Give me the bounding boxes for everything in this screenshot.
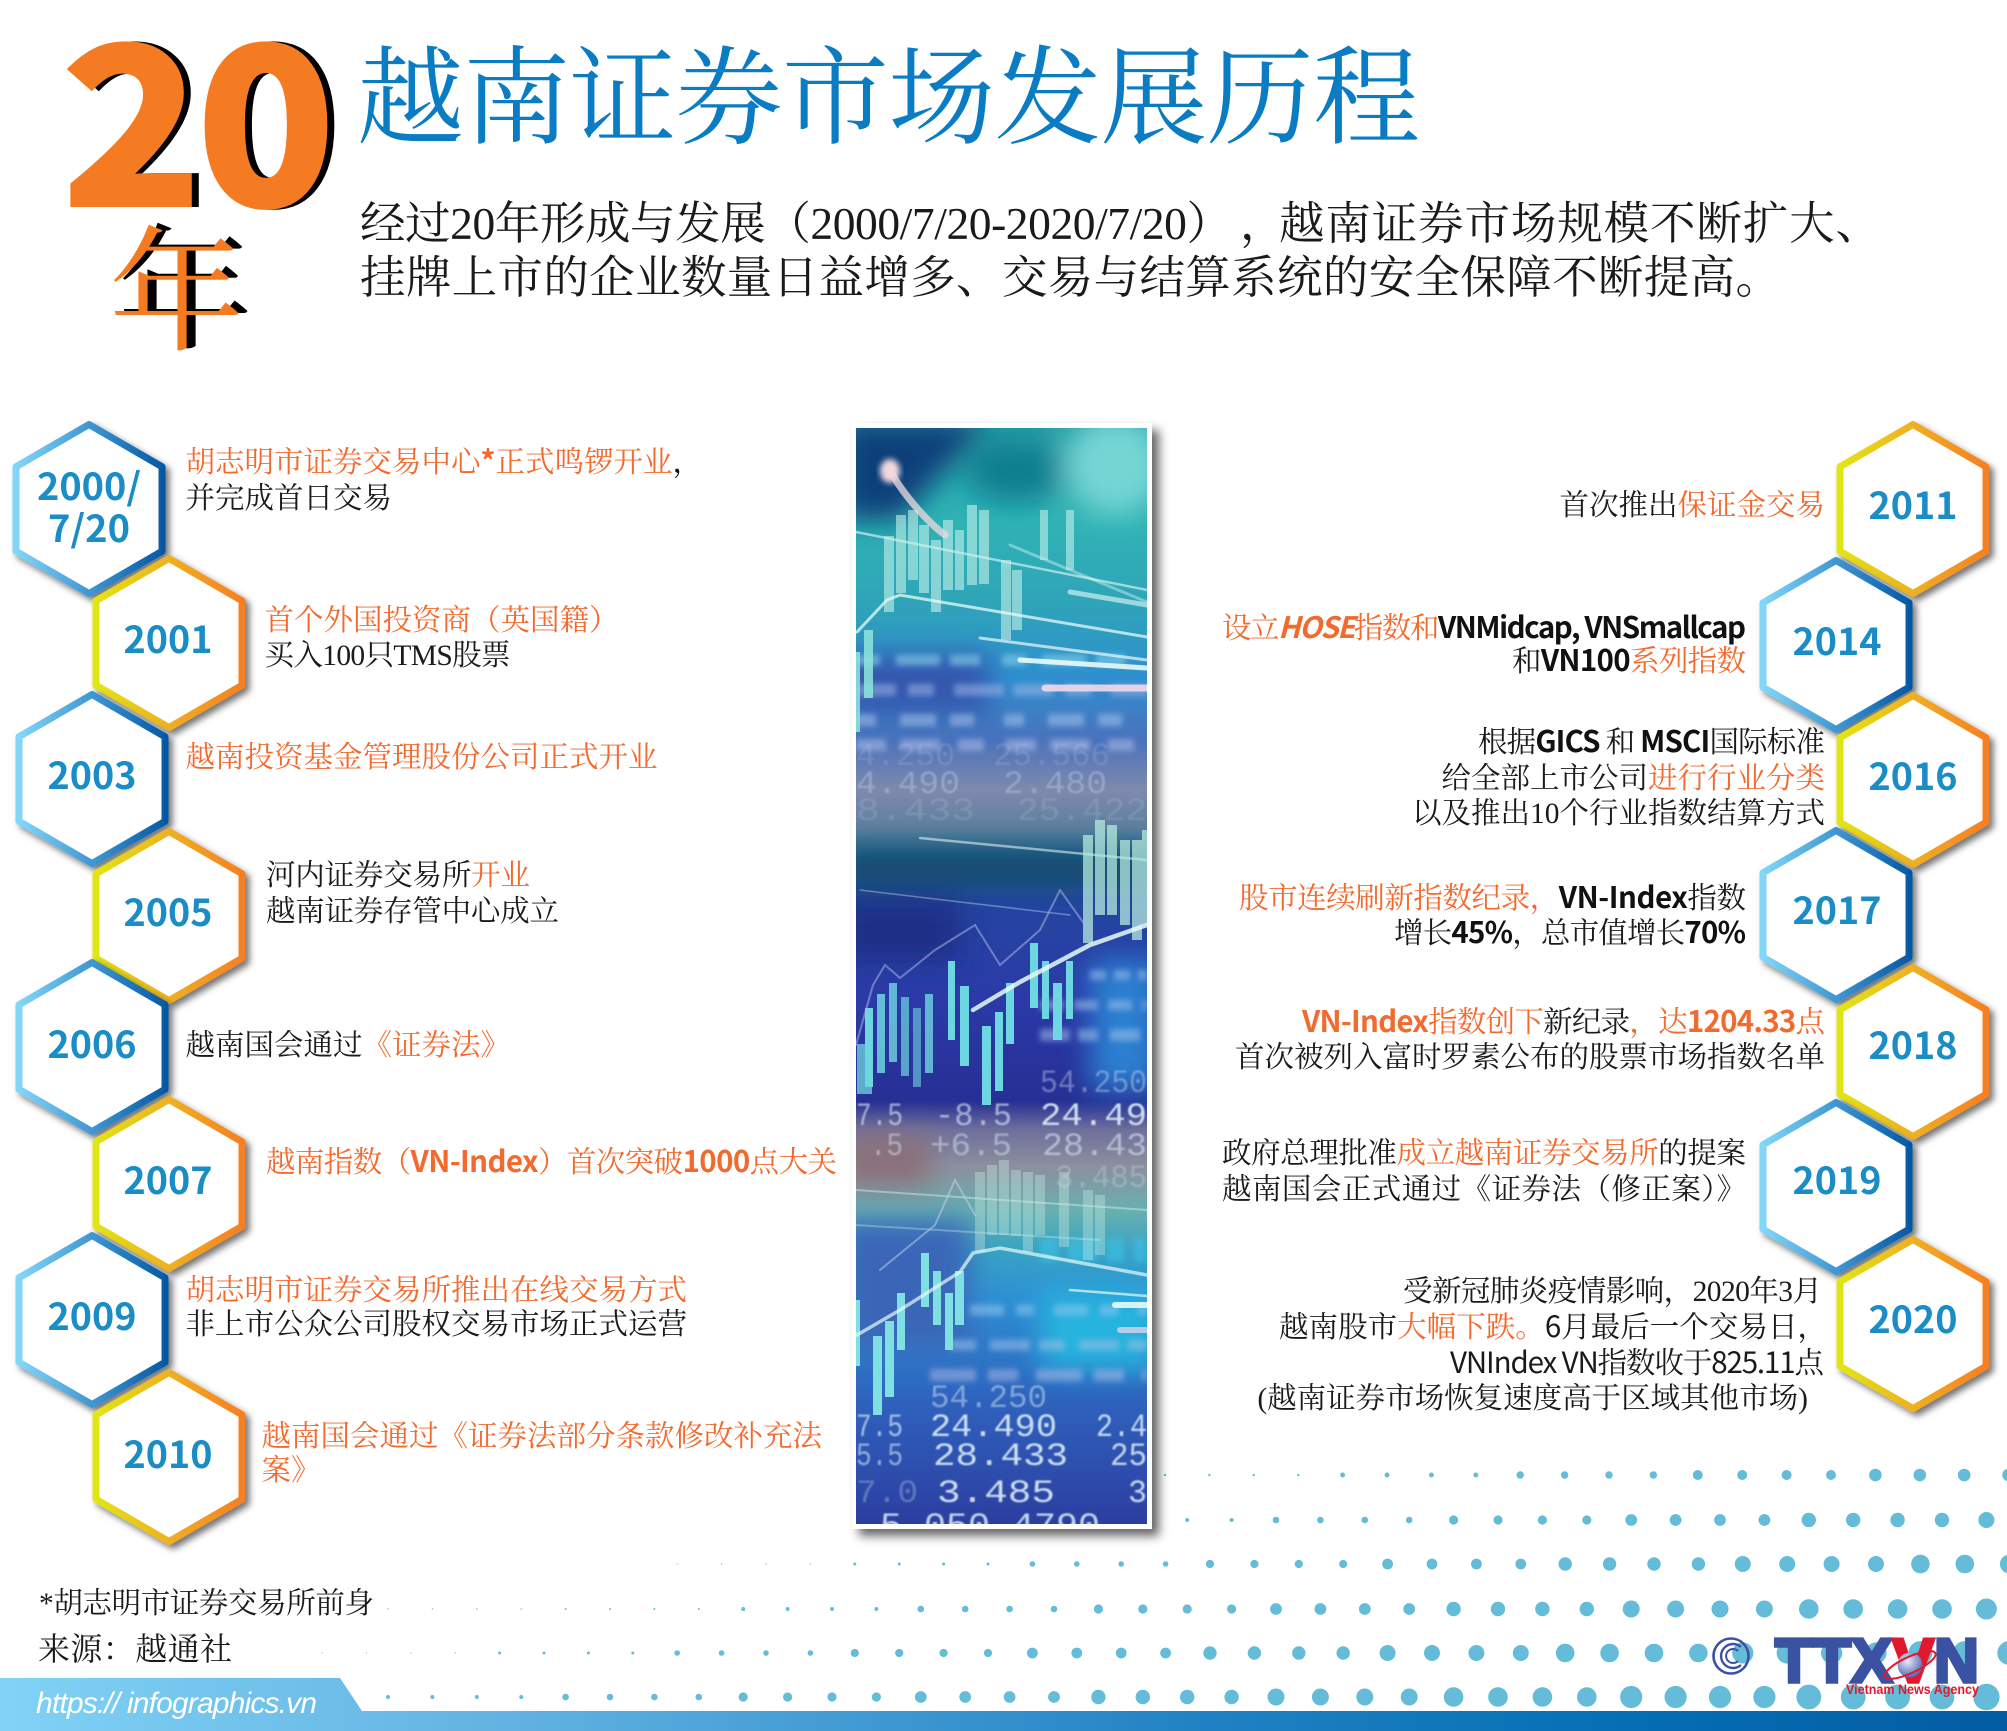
ticker numbers: 7.0: [856, 1475, 918, 1512]
timeline item: 2005: [96, 832, 559, 1000]
text 2009: 非上市公众公司股权交易市场正式运营: [186, 1308, 687, 1341]
timeline item: 2016: [1412, 696, 1986, 864]
text 2017: 股市连续刷新指数纪录，VN-Index指数: [1239, 875, 1746, 917]
title: 越南证券市场发展历程: [357, 12, 1420, 166]
ticker numbers: 7.5: [856, 1409, 903, 1446]
pink highlight: [880, 459, 900, 483]
text 2005: 河内证券交易所开业: [266, 859, 530, 892]
text 2014: 设立HOSE指数和VNMidcap, VNSmallcap: [1222, 605, 1746, 647]
hexagon 2006: [19, 962, 165, 1132]
timeline item: 2017: [1239, 830, 1909, 1000]
intro text: 越南证券市场规模不断扩大、: [1279, 198, 1881, 249]
ticker numbers: 4.490: [856, 766, 960, 803]
hexagon 2014: 2014: [1792, 612, 1882, 666]
ticker numbers: 28.433: [933, 1438, 1068, 1475]
text 2017: [1239, 875, 1746, 952]
horizontal light streaks: [856, 532, 1147, 1330]
text 2019: 越南国会正式通过《证券法（修正案）》: [1222, 1173, 1746, 1206]
text 2010: 案》: [262, 1454, 321, 1487]
ticker numbers: 2.480: [1003, 766, 1107, 803]
hexagon 2020: [1840, 1240, 1986, 1408]
ticker numbers: 24.49: [1040, 1098, 1147, 1135]
hexagon 2006: 2006: [48, 1015, 136, 1069]
ticker numbers: .5: [870, 1128, 903, 1165]
hexagon 2018: [1840, 968, 1986, 1136]
timeline item: 2011: [1559, 424, 1986, 594]
ticker numbers: 28.43: [1042, 1128, 1147, 1165]
ticker numbers: 5.5: [856, 1438, 903, 1475]
trend lines: [856, 470, 1147, 1335]
hexagon 2005: [96, 832, 242, 1000]
ticker numbers: 8.433: [856, 793, 975, 830]
text 2003: 越南投资基金管理股份公司正式开业: [186, 741, 658, 774]
text 2009: 胡志明市证券交易所推出在线交易方式: [186, 1274, 687, 1307]
text 2010: [262, 1420, 823, 1487]
central image panel: [840, 415, 1165, 1545]
text 2018: [1235, 999, 1825, 1074]
text 2018: VN-Index指数创下新纪录，达1204.33点: [1301, 999, 1825, 1041]
hexagon 2000/7/20: [16, 424, 162, 594]
candle bars: middle group: [857, 943, 1073, 1105]
text 2018: 首次被列入富时罗素公布的股票市场指数名单: [1235, 1041, 1825, 1074]
website url: https:// infographics.vn: [36, 1687, 317, 1720]
panel frame: [852, 423, 1152, 1529]
text 2005: [266, 859, 559, 928]
text 2016: 以及推出10个行业指数结算方式: [1412, 797, 1825, 830]
ticker numbers: 54.250: [930, 1380, 1047, 1417]
ticker numbers: +6.5: [930, 1128, 1012, 1165]
text 2020: VNIndex VN指数收于825.11点: [1450, 1340, 1824, 1382]
timeline item: 2014: [1222, 560, 1909, 730]
text 2000/7/20: 胡志明市证券交易中心*正式鸣锣开业，: [186, 439, 702, 481]
year character with shadow: 年: [118, 183, 253, 377]
hexagon 2009: [19, 1236, 165, 1404]
intro text: 经过20年形成与发展（2000/7/20-2020/7/20）: [360, 198, 1232, 249]
text 2006: 越南国会通过《证券法》: [186, 1029, 510, 1062]
ticker numbers: [856, 738, 1147, 1545]
ticker numbers: 4.250: [856, 738, 955, 775]
text 2019: 政府总理批准成立越南证券交易所的提案: [1222, 1137, 1746, 1170]
intro text: ，: [1240, 198, 1286, 249]
text 2020: [1257, 1275, 1827, 1415]
candle bars: lower pale group: [975, 1160, 1105, 1260]
intro text: [360, 198, 1881, 303]
source: 来源：越通社: [38, 1631, 232, 1667]
ticker numbers: 54.250: [1040, 1065, 1147, 1102]
hexagon 2001: 2001: [124, 610, 212, 664]
hexagon 2001: [96, 558, 242, 728]
timeline item: 2020: [1257, 1240, 1986, 1415]
hexagon 2019: 2019: [1792, 1151, 1882, 1205]
text 2016: [1412, 719, 1825, 830]
blurred data blocks: [856, 660, 1147, 1375]
halftone dot background: [322, 1475, 2007, 1697]
hexagon 2018: 2018: [1868, 1016, 1958, 1070]
footer bar: [0, 1678, 2007, 1731]
ticker numbers: 3: [1128, 1475, 1147, 1512]
text 2001: 买入100只TMS股票: [264, 639, 510, 672]
hexagon 2016: [1840, 696, 1986, 864]
logo tagline: Vietnam News Agency: [1846, 1682, 1979, 1697]
hexagon 2007: 2007: [124, 1151, 212, 1205]
text 2014: 和VN100系列指数: [1512, 638, 1746, 680]
text 2020: 越南股市大幅下跌。6月最后一个交易日，: [1279, 1304, 1827, 1346]
hexagon 2019: [1763, 1102, 1909, 1272]
text 2000/7/20: [186, 439, 702, 515]
hexagon 2011: 2011: [1868, 476, 1958, 530]
market chart picture: [856, 428, 1147, 1524]
ticker numbers: 5 050 4790: [880, 1508, 1100, 1545]
text 2010: 越南国会通过《证券法部分条款修改补充法: [262, 1420, 823, 1453]
hexagon 2020: 2020: [1868, 1290, 1958, 1344]
hexagon 2014: [1763, 560, 1909, 730]
footnote: *胡志明市证券交易所前身: [39, 1587, 374, 1620]
timeline item: 2000/7/20: [16, 424, 702, 594]
text 2011: 首次推出保证金交易: [1559, 489, 1825, 522]
ticker numbers: 25: [1110, 1438, 1147, 1475]
hexagon 2017: 2017: [1792, 881, 1882, 935]
ticker numbers: -8.5: [935, 1098, 1012, 1135]
ticker numbers: 25.566: [993, 738, 1110, 775]
text 2000/7/20: 并完成首日交易: [186, 482, 392, 515]
hexagon 2010: 2010: [124, 1425, 212, 1479]
candle bars: upper right group: [1083, 820, 1148, 943]
text 2019: [1222, 1137, 1746, 1206]
text 2016: 给全部上市公司进行行业分类: [1441, 762, 1825, 795]
year character with shadow: 年: [109, 185, 244, 379]
text 2009: [186, 1274, 687, 1341]
timeline item: 2003: [19, 694, 658, 864]
text 2001: [264, 604, 619, 672]
text 2005: 越南证券存管中心成立: [266, 895, 559, 928]
intro text: 挂牌上市的企业数量日益增多、交易与结算系统的安全保障不断提高。: [360, 252, 1781, 303]
text 2001: 首个外国投资商（英国籍）: [264, 604, 619, 637]
timeline item: 2019: [1222, 1102, 1909, 1272]
hexagon 2009: 2009: [48, 1287, 136, 1341]
timeline item: 2006: [19, 962, 510, 1132]
candle bars: top group: [884, 505, 1074, 640]
text 2020: (越南证券市场恢复速度高于区域其他市场): [1257, 1382, 1808, 1415]
hexagon 2000/7/20: 2000/: [37, 457, 141, 511]
logo globe: [1898, 1652, 1922, 1678]
text 2007: 越南指数（VN-Index）首次突破1000点大关: [266, 1139, 837, 1181]
timeline item: 2018: [1235, 968, 1986, 1136]
hexagon 2017: [1763, 830, 1909, 1000]
text 2016: 根据GICS 和 MSCI国际标准: [1478, 719, 1825, 761]
hexagon 2000/7/20: 7/20: [48, 499, 130, 553]
candle bars: lower group: [856, 1253, 964, 1415]
ticker numbers: 24.490: [930, 1409, 1057, 1446]
hexagon 2010: [96, 1372, 242, 1542]
ticker numbers: 7.5: [856, 1098, 903, 1135]
timeline item: 2009: [19, 1236, 687, 1404]
ticker numbers: 3.485: [937, 1475, 1055, 1512]
hexagon 2011: [1840, 424, 1986, 594]
text 2017: 增长45%，总市值增长70%: [1394, 910, 1746, 952]
text 2014: [1222, 605, 1746, 680]
hexagon 2007: [96, 1100, 242, 1268]
hexagon 2003: [19, 694, 165, 864]
ticker numbers: 3.485: [1055, 1160, 1147, 1197]
logo: TTXVN: TTXVN: [1775, 1627, 1979, 1696]
ticker numbers: 2.4: [1096, 1409, 1147, 1446]
ticker numbers: 25.422: [1017, 793, 1147, 830]
hexagon 2003: 2003: [48, 746, 136, 800]
timeline item: 2001: [96, 558, 619, 728]
timeline item: 2010: [96, 1372, 823, 1542]
hexagon 2005: 2005: [124, 883, 212, 937]
timeline item: 2007: [96, 1100, 837, 1268]
icon: copyright: [1714, 1638, 1748, 1674]
hexagon 2016: 2016: [1868, 747, 1958, 801]
text 2020: 受新冠肺炎疫情影响，2020年3月: [1403, 1275, 1822, 1308]
